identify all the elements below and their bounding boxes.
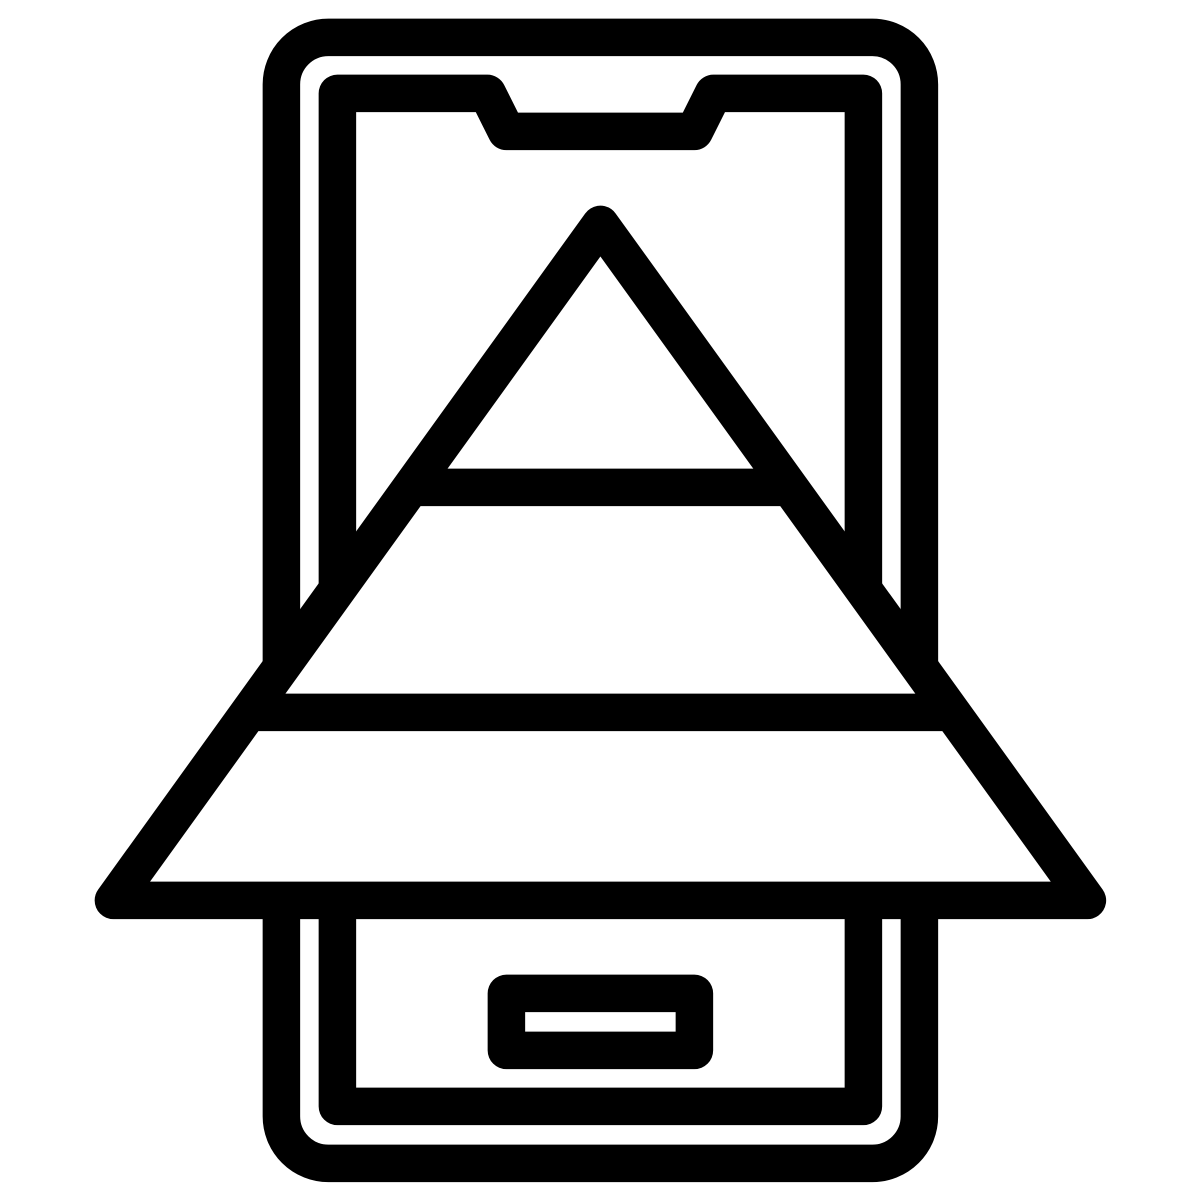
pyramid outline — [113, 224, 1087, 900]
pyramid upper divider — [411, 469, 789, 506]
pyramid lower divider — [259, 694, 941, 731]
pyramid chart — [113, 224, 1087, 900]
phone body outline — [281, 37, 919, 1163]
phone screen with notch — [337, 93, 863, 1106]
phone home button — [506, 993, 694, 1050]
